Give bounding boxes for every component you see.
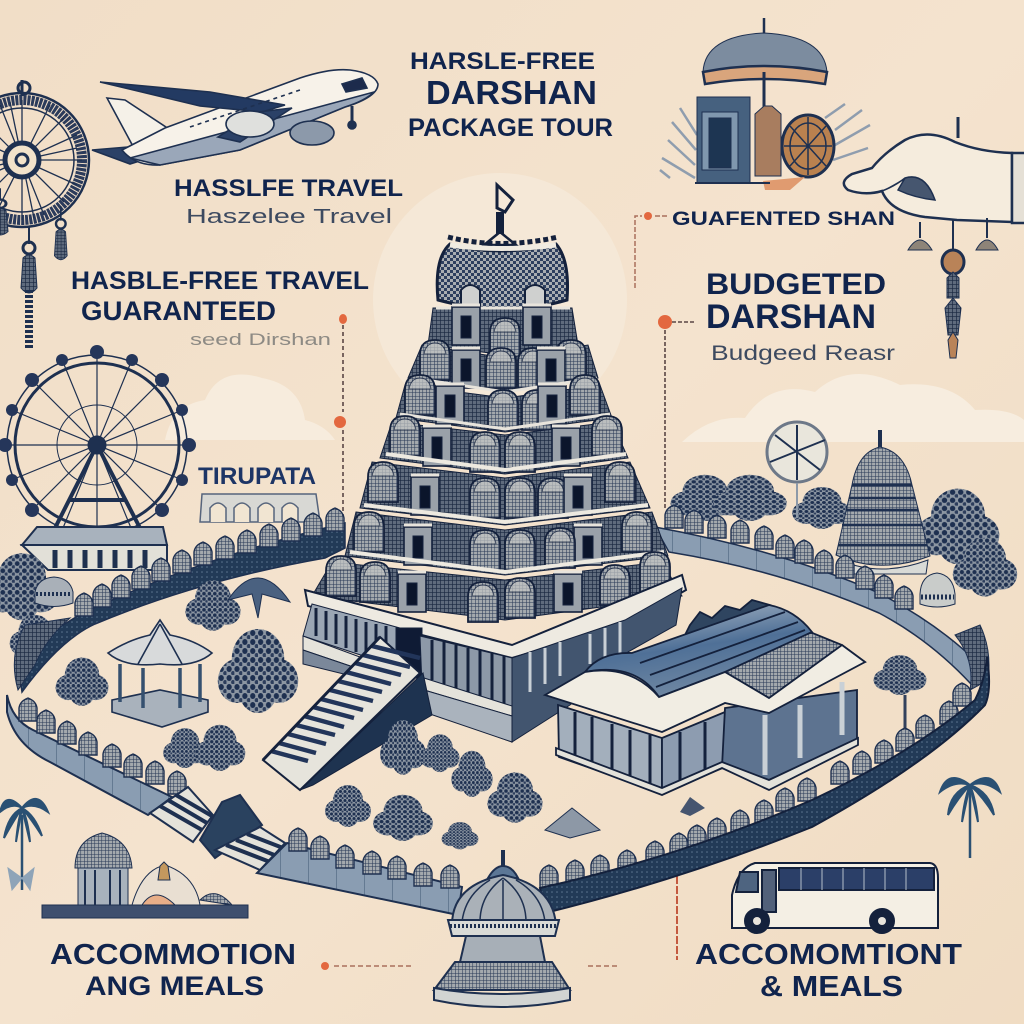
crown dome — [437, 237, 568, 309]
tier 4 — [380, 416, 628, 474]
label: hassle travel: HASSLFE TRAVEL — [174, 175, 403, 202]
icon: courtyard tree right — [874, 655, 926, 735]
tier 1 — [428, 305, 578, 358]
right hall — [545, 600, 865, 795]
wall band front bottom left — [257, 843, 462, 915]
wall band front right — [540, 657, 989, 913]
halo behind temple — [373, 173, 627, 427]
trees behind wall right — [670, 475, 1017, 597]
trees behind wall left — [0, 553, 60, 661]
icon: front dome monument — [434, 850, 570, 1007]
label: hassle travel: Haszelee Travel — [186, 206, 392, 228]
wall ring back — [14, 523, 989, 692]
wall merlons front left — [19, 698, 186, 794]
icon: bottom-left shrine — [42, 833, 248, 918]
tier 7 — [312, 552, 682, 622]
cloud right — [682, 374, 1024, 442]
lower hall left — [303, 604, 422, 680]
label: hassle-free guaranteed: HASBLE-FREE TRAVEL — [71, 267, 369, 295]
wall merlons back left — [75, 508, 344, 616]
finial — [484, 185, 516, 245]
label: accommodation right: ACCOMOMTIONT — [695, 939, 962, 971]
tier 6 — [345, 512, 668, 575]
icon: ferris wheel — [0, 345, 196, 570]
cornice platform — [305, 575, 686, 658]
gopuram temple tower — [263, 185, 686, 790]
garden bushes and trees — [56, 578, 705, 849]
tier 3 — [396, 375, 612, 432]
icon: bus — [732, 863, 938, 933]
icon: pointing hand — [844, 117, 1024, 223]
icon: right tiered temple — [836, 430, 930, 574]
icon: wheel on pole — [767, 422, 827, 518]
label: budgeted darshan: Budgeed Reasr — [711, 342, 895, 365]
wall band front left — [7, 695, 172, 815]
title — [408, 48, 613, 142]
main stairs — [263, 637, 432, 790]
icon: right palm — [940, 778, 1000, 858]
label: accommodation right: & MEALS — [760, 971, 903, 1003]
title: DARSHAN — [426, 74, 597, 111]
lower courtyard stairs — [150, 787, 285, 870]
lower hall right — [512, 588, 682, 742]
title: PACKAGE TOUR — [408, 114, 613, 142]
label: hassle travel — [174, 175, 403, 228]
icon: small arcade building — [200, 494, 320, 522]
icon: small left dome — [35, 577, 73, 606]
label: accommodation left — [50, 939, 296, 1001]
cloud left — [165, 374, 335, 440]
icon: left palm — [0, 799, 48, 890]
tier 5 — [360, 462, 650, 525]
label: budgeted darshan: BUDGETED — [706, 268, 886, 301]
label: accommodation right — [695, 939, 962, 1003]
label: accommodation left: ANG MEALS — [85, 971, 264, 1001]
label: hassle-free guaranteed — [71, 267, 369, 349]
label: accommodation left: ACCOMMOTION — [50, 939, 296, 971]
label: guaranteed shan: GUAFENTED SHAN — [672, 209, 895, 230]
connector lines and red dots — [321, 212, 695, 970]
label: hassle-free guaranteed: GUARANTEED — [81, 296, 276, 326]
icon: small right dome — [920, 573, 955, 607]
label: hassle-free guaranteed: seed Dirshan — [190, 330, 331, 349]
icon: parasol and offerings — [660, 18, 870, 190]
icon: hanging ornaments right — [908, 218, 998, 358]
label: budgeted darshan — [706, 268, 895, 365]
label: tirupata: TIRUPATA — [198, 463, 316, 490]
icon: gazebo — [108, 620, 212, 727]
tier 2 — [408, 340, 598, 392]
wall merlons front — [289, 683, 971, 888]
icon: dreamcatcher ornament — [0, 80, 89, 350]
title: HARSLE-FREE — [410, 48, 595, 75]
label: budgeted darshan: DARSHAN — [706, 298, 876, 336]
wall merlons back right — [665, 505, 913, 609]
lower hall centre — [420, 636, 512, 742]
icon: airplane — [92, 70, 378, 165]
